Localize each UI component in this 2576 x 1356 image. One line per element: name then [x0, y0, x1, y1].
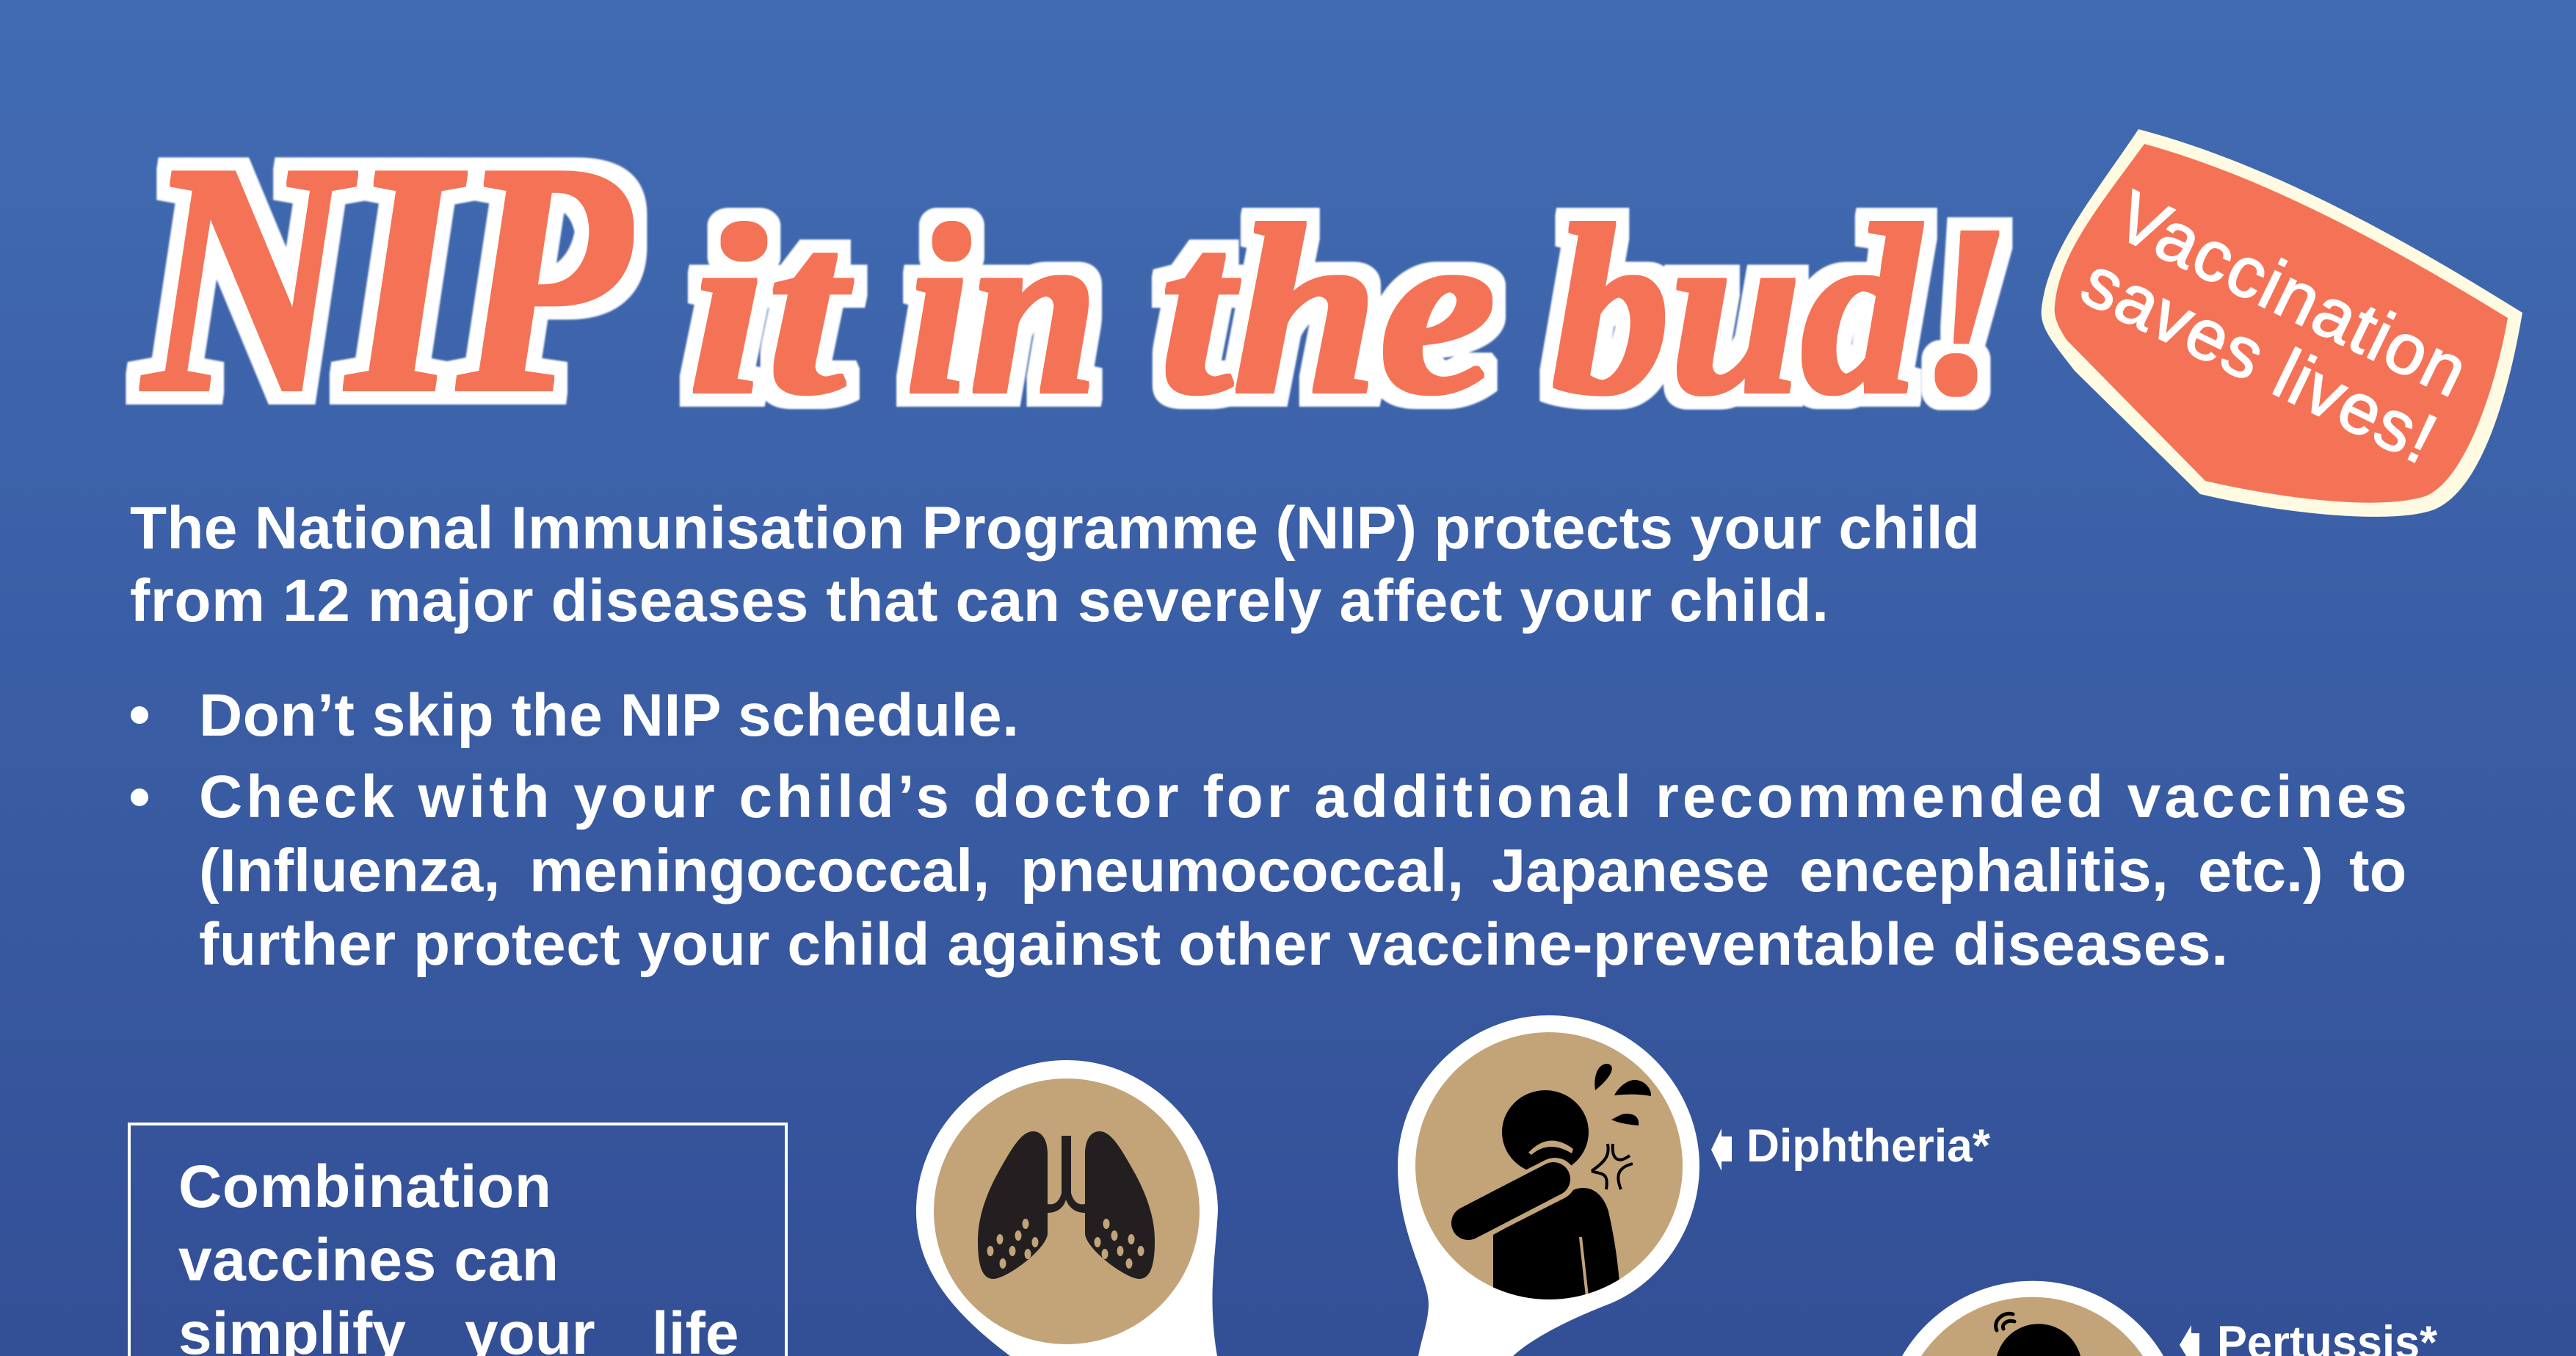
bullet list [131, 682, 2407, 978]
combination vaccines box: vaccines can [178, 1227, 559, 1294]
bullet 2: Japanese [1492, 836, 1769, 904]
intro paragraph [130, 495, 1980, 634]
combination vaccines box [129, 1124, 786, 1356]
bullet 2: pneumococcal, [1020, 836, 1464, 904]
title [139, 95, 2011, 461]
bubble: lungs [916, 1060, 1218, 1356]
bullet 2: to [2349, 836, 2406, 904]
intro paragraph: The National Immunisation Programme (NIP) protects your child [130, 495, 1980, 562]
title: in [906, 176, 1098, 444]
icon: coughing person [1468, 1064, 1651, 1321]
badge: vaccination saves lives [2042, 129, 2522, 517]
title: bud! [1552, 176, 2011, 444]
arrow: pertussis [2180, 1325, 2199, 1356]
icon: lungs [978, 1131, 1155, 1279]
badge text: saves lives! [2070, 241, 2448, 479]
title: it [688, 176, 855, 444]
bullet 2: etc.) [2198, 836, 2323, 904]
combination vaccines box: Combination [178, 1153, 551, 1220]
bullet 2: encephalitis, [1799, 836, 2169, 904]
bullet 1: Don’t skip the NIP schedule. [199, 682, 1019, 749]
badge text: Vaccination [2105, 175, 2480, 412]
bubble: pertussis [1902, 1281, 2163, 1356]
bullet 2 [131, 764, 2407, 978]
bullet 2: Check with your child’s doctor for additional recommended vaccines [199, 764, 2407, 830]
bullet 2: (Influenza, [199, 836, 500, 904]
bullet 2: further protect your child against other vaccine-preventable diseases. [199, 911, 2228, 978]
title: the [1159, 176, 1496, 444]
arrow: diphtheria [1711, 1128, 1732, 1171]
bullet 2: meningococcal, [529, 836, 990, 904]
title: NIP [139, 95, 634, 461]
icon: pertussis person head [1996, 1313, 2080, 1356]
label: diphtheria: Diphtheria* [1746, 1120, 1990, 1172]
intro paragraph: from 12 major diseases that can severely affect your child. [130, 568, 1829, 634]
bubble: diphtheria coughing person [1398, 1015, 1699, 1356]
